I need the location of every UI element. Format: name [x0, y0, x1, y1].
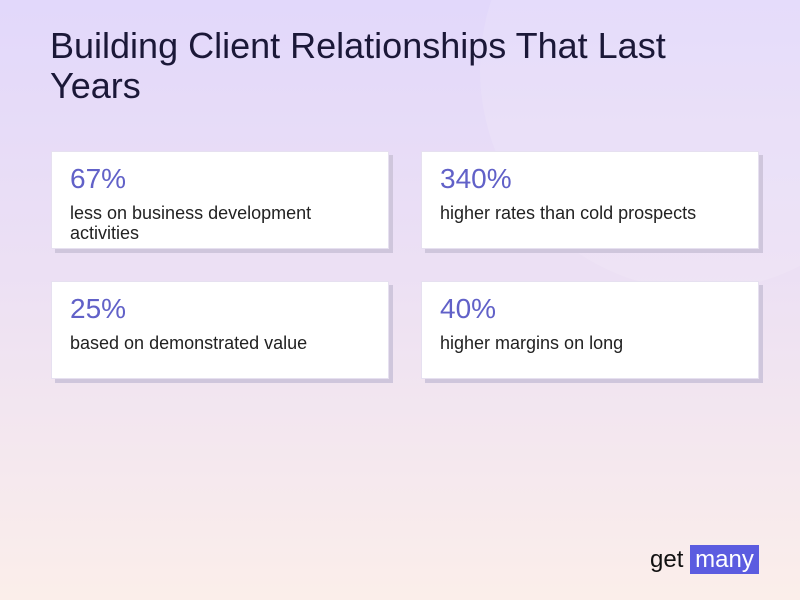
logo: many — [695, 546, 754, 573]
stat number: 340% — [440, 163, 512, 194]
card: 25% — [51, 281, 389, 379]
card: 40% — [421, 281, 759, 379]
logo: get — [650, 546, 683, 573]
card: 67% — [51, 151, 389, 249]
stat text: higher margins on long — [440, 333, 623, 353]
title: Building Client Relationships That Last Years — [50, 25, 666, 106]
stat text: based on demonstrated value — [70, 333, 307, 353]
stat number: 25% — [70, 293, 126, 324]
stat text: higher rates than cold prospects — [440, 203, 696, 223]
stat text: less on business development activities — [70, 203, 311, 243]
stat number: 40% — [440, 293, 496, 324]
stat number: 67% — [70, 163, 126, 194]
card: 340% — [421, 151, 759, 249]
logo — [650, 545, 759, 574]
